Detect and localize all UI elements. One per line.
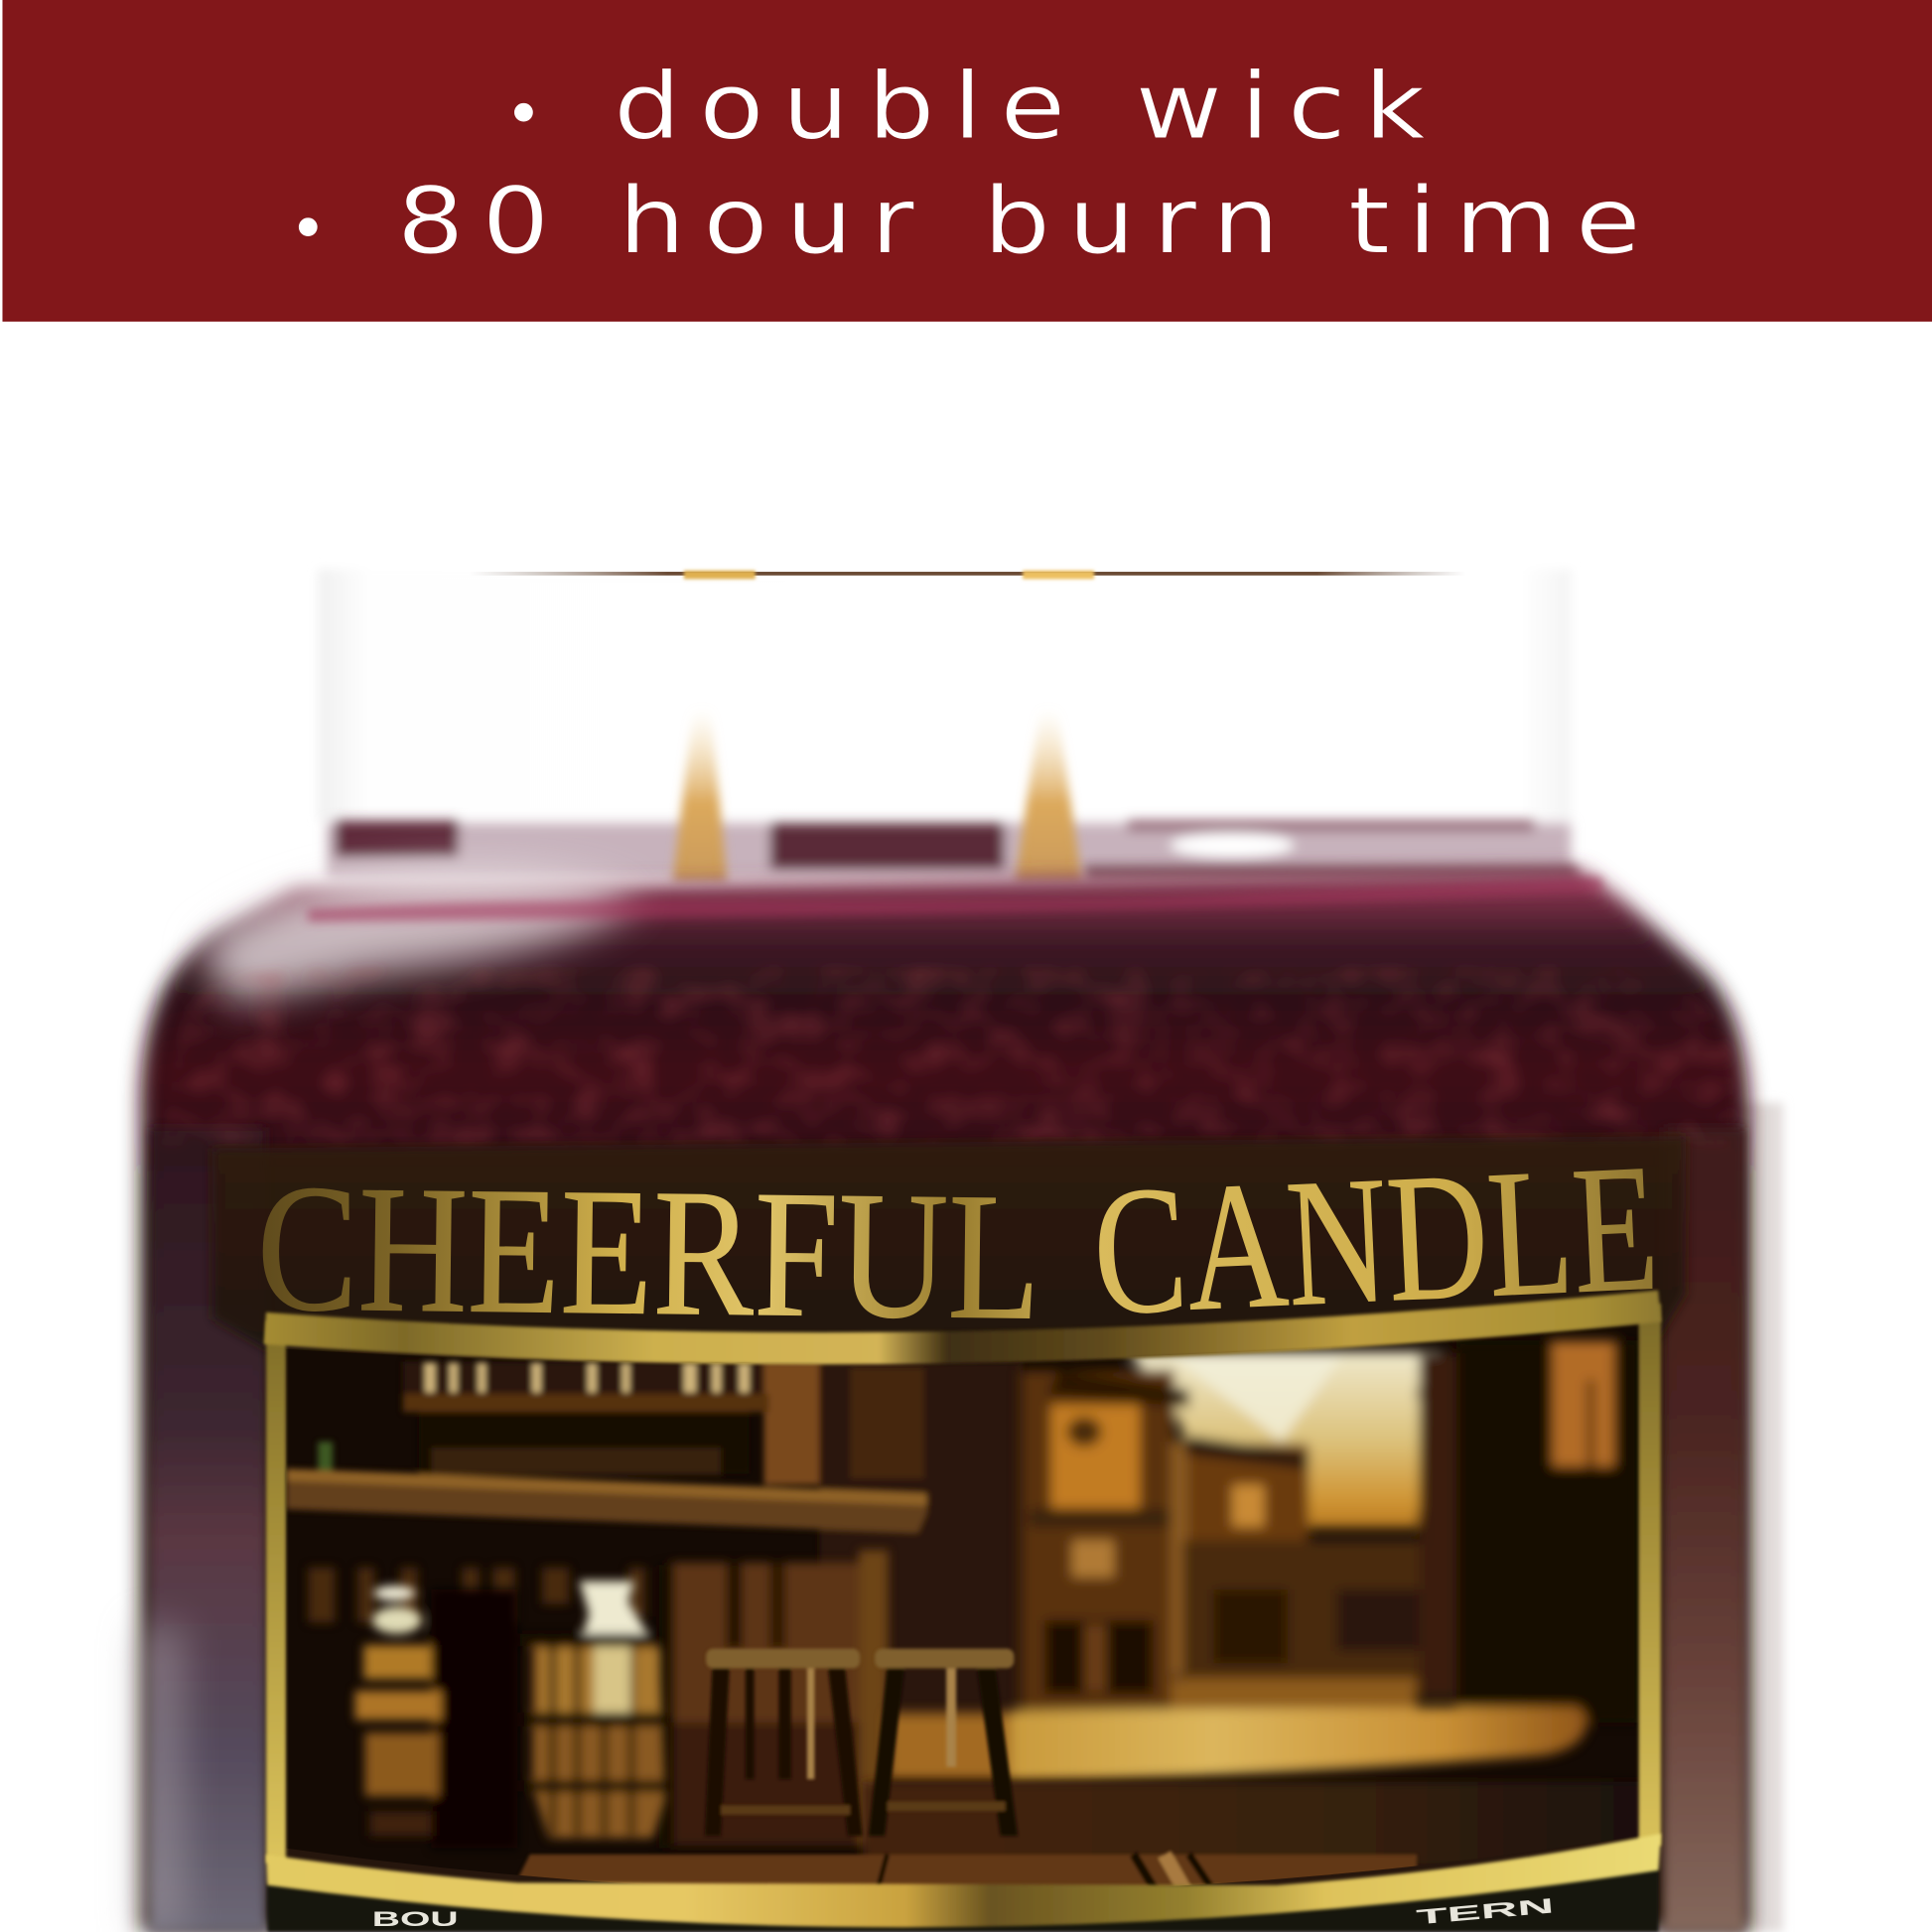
candle jar photo <box>138 569 1783 1932</box>
dark label footer <box>267 1866 1658 1932</box>
far side wax ring <box>327 821 1578 880</box>
foreground road <box>863 1782 1651 1867</box>
red banner <box>2 0 1932 322</box>
jar body with dark wax <box>138 868 1749 1932</box>
scent name on label (partly visible): BOU <box>372 1908 459 1931</box>
brand name: Cheerful Candle: CANDLE <box>1089 1125 1662 1353</box>
scene base <box>286 1324 1638 1874</box>
banner text: double wick: double wick <box>614 53 1426 160</box>
brand name: Cheerful Candle <box>256 1125 1662 1358</box>
brand name: Cheerful Candle: CHEERFUL <box>256 1146 1041 1358</box>
barrels <box>354 1581 665 1849</box>
brown label <box>211 1136 1686 1349</box>
glass rim above wax <box>318 569 1571 822</box>
gold frame top band <box>265 1307 1660 1348</box>
scent name on label (partly visible): TERN <box>1416 1895 1555 1930</box>
bar counter <box>286 1468 926 1533</box>
tavern scene <box>277 1318 1651 1932</box>
banner text: double wick: • <box>504 77 542 152</box>
scent name on label (partly visible) <box>372 1895 1555 1931</box>
wood table top <box>517 1855 1417 1891</box>
lower wood wall <box>308 1550 889 1849</box>
street view <box>888 1340 1639 1782</box>
gold frame bottom band <box>266 1834 1661 1927</box>
gold frame sides <box>266 1304 1661 1863</box>
banner text: 80 hour burn time: • <box>289 193 327 267</box>
banner text: 80 hour burn time: 80 hour burn time <box>397 167 1641 275</box>
bar interior <box>286 1361 1023 1719</box>
two wicks <box>673 671 1082 881</box>
bar stools <box>705 1649 1018 1836</box>
jar side glass <box>1731 1103 1783 1932</box>
